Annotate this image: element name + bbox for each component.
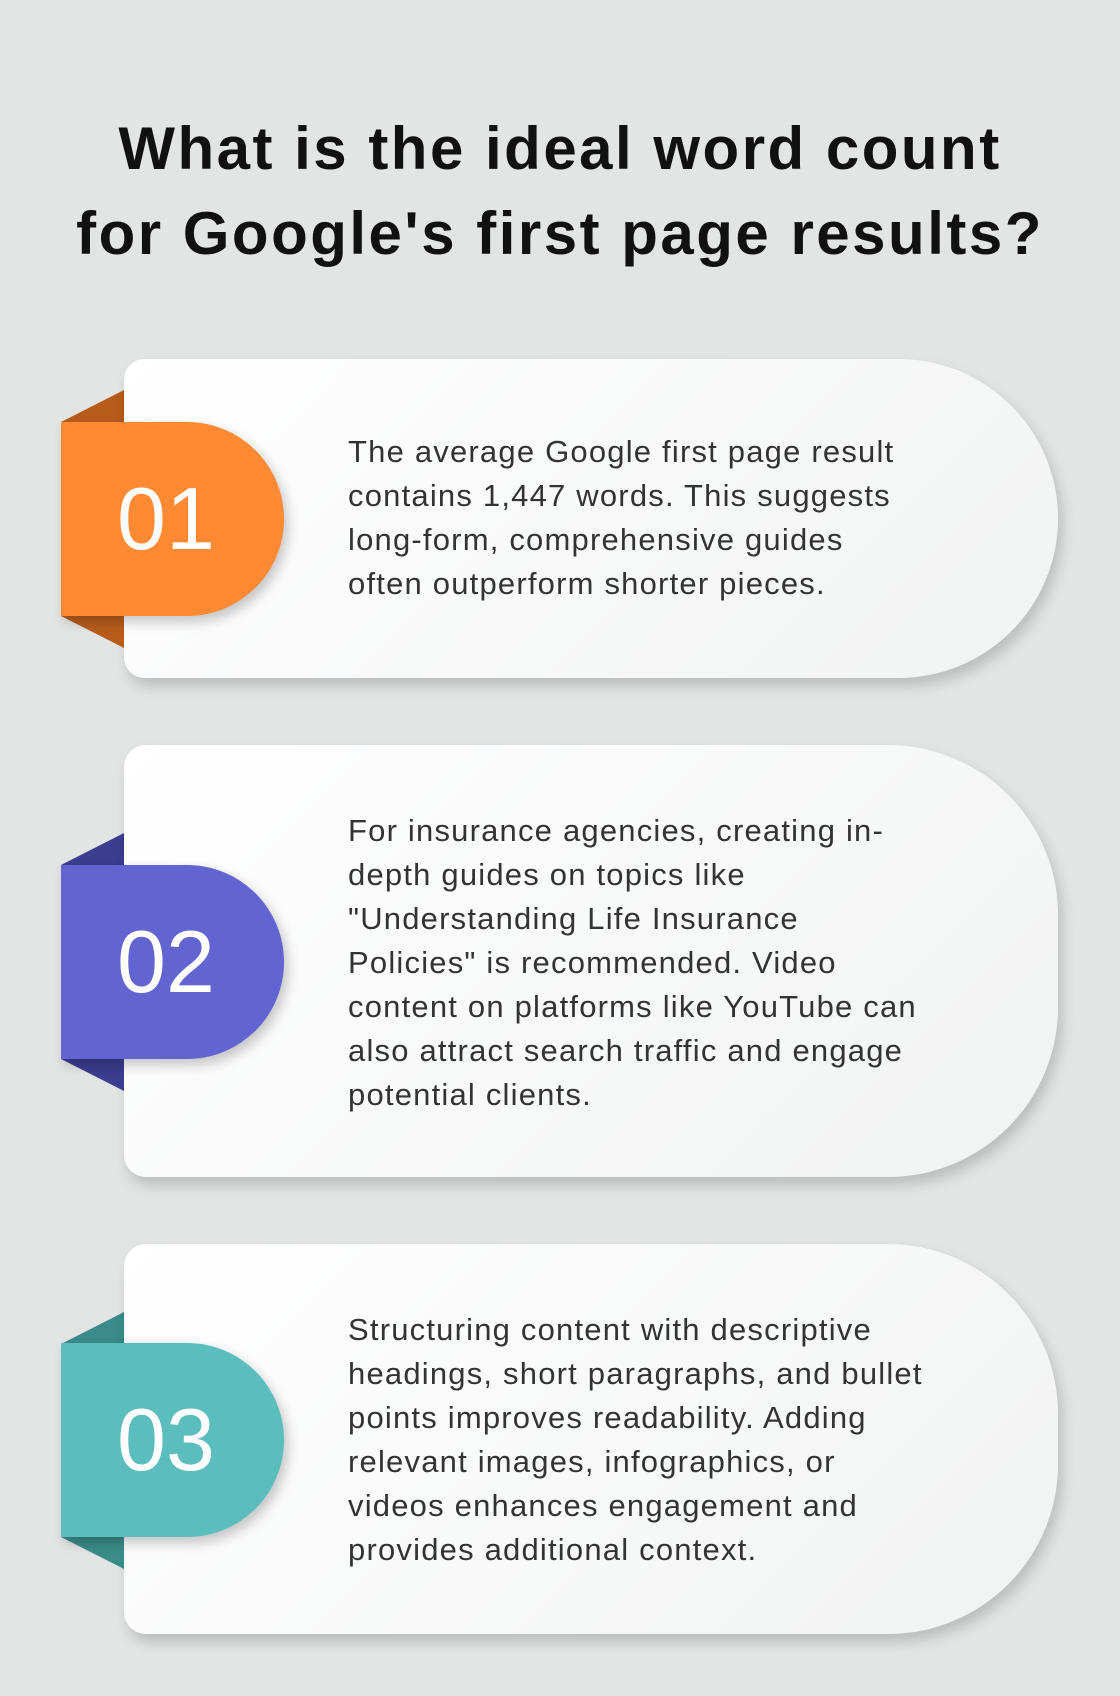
fold: item 1 bottom — [61, 616, 124, 648]
number badge 02 — [61, 865, 284, 1059]
text: item 2: content on platforms like YouTube can — [348, 989, 917, 1024]
text: item 3: points improves readability. Adding — [348, 1400, 867, 1435]
title — [76, 115, 1044, 267]
text: item 1: The average Google first page result — [348, 434, 894, 469]
text: item 3: provides additional context. — [348, 1532, 757, 1567]
number badge 01: 01 — [117, 469, 215, 568]
text: item 3: Structuring content with descriptive — [348, 1312, 872, 1347]
text: item 2 — [348, 813, 917, 1112]
text: item 1: contains 1,447 words. This suggests — [348, 478, 891, 513]
text: item 1: long-form, comprehensive guides — [348, 522, 844, 557]
card: item 3 — [124, 1244, 1058, 1634]
text: item 3: videos enhances engagement and — [348, 1488, 858, 1523]
text: item 1 — [348, 434, 894, 601]
text: item 2: depth guides on topics like — [348, 857, 746, 892]
text: item 3: relevant images, infographics, or — [348, 1444, 836, 1479]
text: item 1: often outperform shorter pieces. — [348, 566, 826, 601]
text: item 3: headings, short paragraphs, and bullet — [348, 1356, 923, 1391]
fold: item 3 top — [63, 1312, 124, 1343]
number badge 03: 03 — [117, 1390, 215, 1489]
number badge 02: 02 — [117, 912, 215, 1011]
number badge 03 — [61, 1343, 284, 1537]
text: item 2: "Understanding Life Insurance — [348, 901, 799, 936]
text: item 2: potential clients. — [348, 1077, 592, 1112]
panel: item 1 — [59, 359, 1068, 692]
text: item 2: Policies" is recommended. Video — [348, 945, 837, 980]
card: item 2 — [124, 745, 1058, 1177]
panel: item 3 — [59, 1244, 1068, 1648]
number badge 01 — [61, 422, 284, 616]
fold: item 3 bottom — [61, 1537, 124, 1569]
title: What is the ideal word count — [118, 115, 1002, 182]
fold: item 2 bottom — [61, 1059, 124, 1091]
card: item 1 — [124, 359, 1058, 678]
title: for Google's first page results? — [76, 200, 1044, 267]
text: item 3 — [348, 1312, 923, 1567]
fold: item 2 top — [61, 833, 124, 865]
fold: item 1 top — [61, 390, 124, 422]
text: item 2: For insurance agencies, creating in- — [348, 813, 884, 848]
text: item 2: also attract search traffic and engage — [348, 1033, 903, 1068]
panel: item 2 — [59, 745, 1068, 1191]
